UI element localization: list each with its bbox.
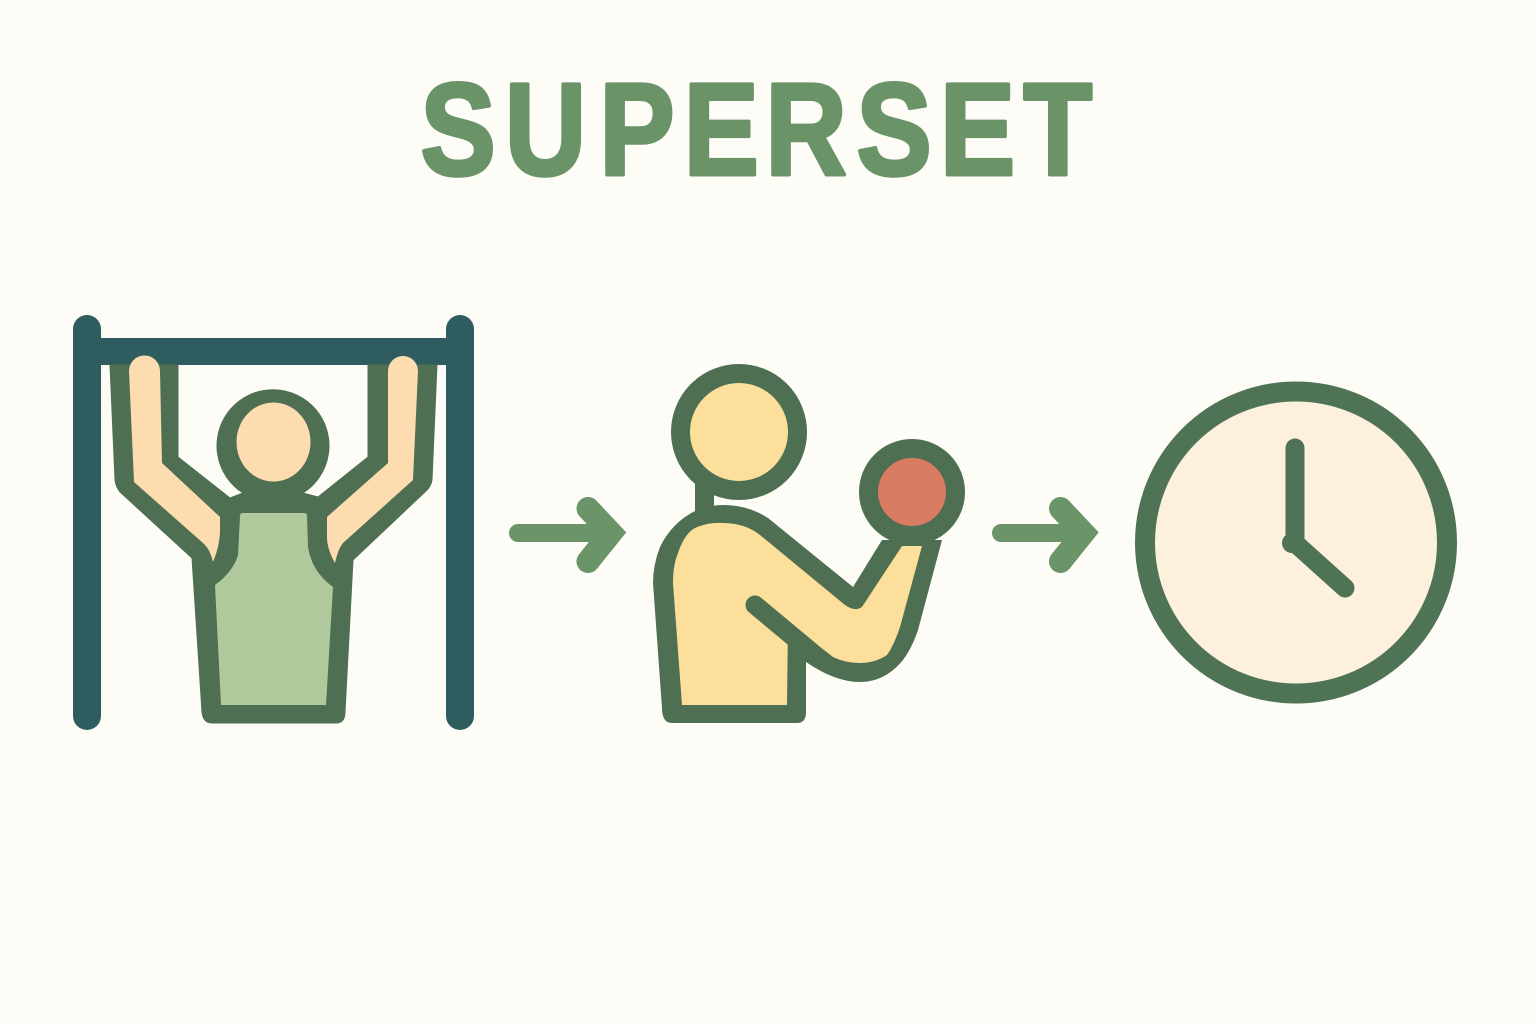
clock hands — [1295, 448, 1345, 588]
head — [236, 402, 310, 482]
body outline — [653, 505, 942, 723]
right arm — [327, 356, 418, 563]
person outline — [110, 365, 437, 723]
icon: clock — [1145, 392, 1447, 694]
clock face — [1145, 392, 1447, 694]
arm crease — [755, 605, 815, 655]
head — [680, 374, 798, 490]
icon: pull-up bar — [73, 315, 474, 730]
arrow: curl to rest — [1001, 508, 1084, 562]
neck — [695, 480, 714, 515]
icon: person with dumbbell — [653, 374, 956, 723]
clock pivot — [1282, 533, 1302, 553]
body fill — [673, 523, 922, 705]
left arm — [129, 356, 220, 562]
title: SUPERSET — [421, 55, 1092, 202]
tank top — [215, 513, 333, 705]
arrow: pull-up to curl — [518, 508, 611, 562]
dumbbell ball — [868, 448, 956, 536]
icon: person doing pull-up — [110, 356, 437, 723]
